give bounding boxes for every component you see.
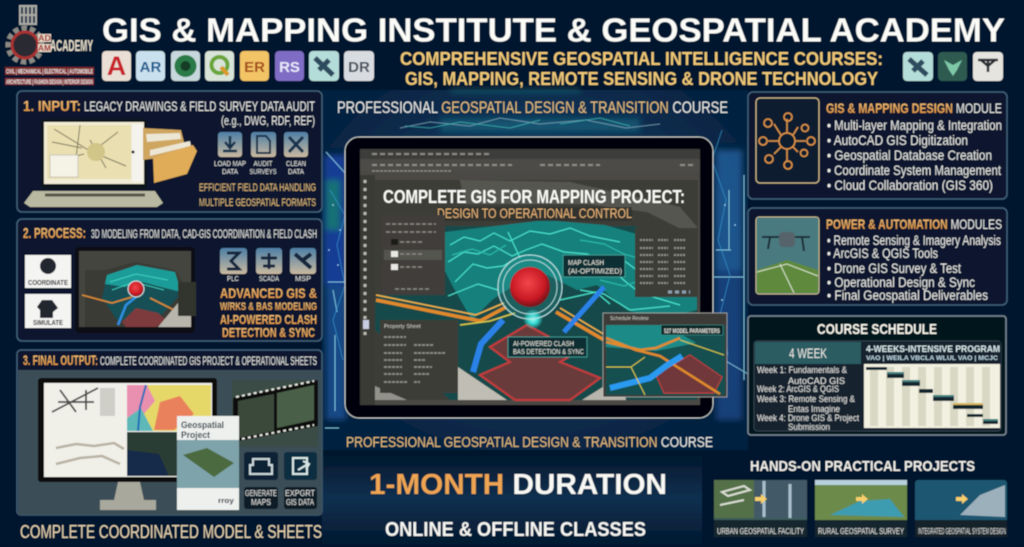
title: GIS & MAPPING INSTITUTE & GEOSPATIAL ACADEMY xyxy=(102,12,1005,48)
badge: coordinate xyxy=(25,255,71,288)
list: automation topics: • ArcGIS & QGIS Tools xyxy=(827,246,938,261)
project: urban facility: URBAN GEOSPATIAL FACILITY xyxy=(717,527,804,536)
box: geospatial project xyxy=(177,416,239,510)
week list: Week 3: Remote Sensing & xyxy=(757,394,856,405)
heading: automation modules: POWER & AUTOMATION MODULES xyxy=(826,216,1002,232)
icon: load map data: DATA xyxy=(222,167,238,176)
icon: audit surveys xyxy=(250,132,276,176)
project: integrated system xyxy=(915,480,1007,537)
heading: hands-on projects: HANDS-ON PRACTICAL PROJECTS xyxy=(750,458,975,475)
icon: load map data xyxy=(214,132,246,176)
week list: Week 1: Fundamentals & xyxy=(757,365,848,376)
delivery mode: ONLINE & OFFLINE CLASSES xyxy=(385,519,646,541)
box: geospatial project: Project xyxy=(181,430,211,441)
subtitle: GIS, MAPPING, REMOTE SENSING & DRONE TECHNOLOGY xyxy=(405,69,878,89)
icon: clean data xyxy=(284,132,308,176)
logo: CAD CAM Academy: ACADEMY xyxy=(50,38,93,55)
project: rural survey xyxy=(815,480,907,537)
panel: 2 process xyxy=(17,219,322,341)
tile: export gis data: GIS DATA xyxy=(286,498,315,507)
layers panel xyxy=(382,215,445,295)
heading: input: (e.g., DWG, RDF, REF) xyxy=(221,113,315,128)
heading: final output: 3. FINAL OUTPUT: xyxy=(23,352,98,368)
tile: generate maps xyxy=(244,452,278,509)
gantt chart xyxy=(861,342,1001,428)
table panel xyxy=(635,228,697,297)
project: urban facility xyxy=(714,480,807,537)
icons: PLC SCADA MSP: MSP xyxy=(295,276,311,283)
box: geospatial project: rroy xyxy=(218,498,234,505)
callout: map clash: (AI-OPTIMIZED) xyxy=(568,268,622,276)
icons: PLC SCADA MSP: PLC xyxy=(227,276,239,283)
inset: model parameters: Schedule Review xyxy=(610,316,649,322)
list: automation topics xyxy=(827,233,1001,303)
screen xyxy=(360,149,700,405)
list: mapping topics: • AutoCAD GIS Digitization xyxy=(827,132,968,148)
technology icons right xyxy=(903,52,1003,81)
heading: final output: COMPLETE COORDINATED GIS PROJECT & OPERATIONAL SHEETS xyxy=(100,354,317,368)
gantt chart: 4-WEEKS-INTENSIVE PROGRAM xyxy=(866,344,1000,354)
footer: left caption: COMPLETE COORDINATED MODEL & SHEETS xyxy=(20,522,322,542)
screen title: DESIGN TO OPERATIONAL CONTROL xyxy=(437,205,632,221)
callout: ai clash: AI-POWERED CLASH xyxy=(513,341,574,348)
panel: 1 input xyxy=(17,91,322,212)
folders xyxy=(143,128,197,183)
heading: input: LEGACY DRAWINGS & FIELD SURVEY DATA AUDIT xyxy=(84,98,315,114)
map scene xyxy=(375,180,697,400)
course heading top: PROFESSIONAL GEOSPATIAL DESIGN & TRANSITION COURSE xyxy=(337,98,728,117)
callout: ai clash: BAS DETECTION & SYNC xyxy=(513,349,584,356)
software icon row xyxy=(102,51,374,81)
list: automation topics: • Final Geospatial Deliverables xyxy=(827,288,988,303)
list: automation topics: • Drone GIS Survey & Test xyxy=(827,261,961,276)
icon: clean data: DATA xyxy=(288,167,304,176)
image: drone over fields xyxy=(756,217,819,294)
gantt chart: VAO | WEILA VBCLA WLUL VAO | MCJC xyxy=(866,356,999,362)
software icon row: RS xyxy=(279,59,300,76)
icon: load map data: LOAD MAP xyxy=(214,159,246,168)
icon: clean data: CLEAN xyxy=(286,159,306,168)
clash sphere xyxy=(498,255,562,329)
icon: audit surveys: SURVEYS xyxy=(250,167,276,176)
week list: Week 4: Drone GIS & Project xyxy=(757,413,859,424)
caption: process: ADVANCED GIS & xyxy=(220,285,317,301)
heading: process: 3D MODELING FROM DATA, CAD-GIS COORDINATION & FIELD CLASH xyxy=(91,227,317,241)
caption: process: AI-POWERED CLASH xyxy=(220,312,317,327)
properties panel xyxy=(380,320,458,393)
logo: CAD CAM Academy: CIVIL | MECHANICAL | ELECTRICAL | AUTOMOBILE xyxy=(6,70,93,76)
list: automation topics: • Operational Design & Sync xyxy=(827,275,975,290)
logo: CAD CAM Academy: ARCHITECTURE | FASHION DESIGN | INTERIOR DESIGN xyxy=(6,80,93,86)
project: rural survey: RURAL GEOSPATIAL SURVEY xyxy=(818,527,905,536)
callout: map clash: MAP CLASH xyxy=(568,260,604,267)
box: geospatial project: Geospatial xyxy=(181,420,224,431)
badge: simulate: SIMULATE xyxy=(33,320,63,327)
icons: PLC SCADA MSP xyxy=(220,248,316,283)
subtitle: COMPREHENSIVE GEOSPATIAL INTELLIGENCE COURSES: xyxy=(400,49,883,69)
icon: audit surveys: AUDIT xyxy=(254,159,273,168)
panel: course schedule xyxy=(748,316,1006,435)
week list: 4 WEEK xyxy=(789,345,827,361)
week list xyxy=(755,342,861,433)
caption: process xyxy=(220,285,317,340)
badge: coordinate: COORDINATE xyxy=(28,280,68,287)
caption: input: MULTIPLE GEOSPATIAL FORMATS xyxy=(199,197,316,209)
tile: export gis data: EXPGRT xyxy=(285,489,315,498)
heading: input xyxy=(23,98,315,128)
software icon row: DR xyxy=(348,59,370,76)
icon: network xyxy=(756,98,819,183)
tile: export gis data xyxy=(284,452,317,509)
list: mapping topics: • Cloud Collaboration (GIS 360) xyxy=(827,177,993,193)
mini tablet with model xyxy=(75,247,196,333)
panel: gis and mapping module xyxy=(748,92,1007,199)
software icon row: ER xyxy=(244,59,265,76)
heading: final output xyxy=(23,352,317,368)
software icon row: AR xyxy=(140,59,161,76)
tile: generate maps: GENERATE xyxy=(245,489,277,498)
callout: ai clash xyxy=(508,337,587,357)
caption: process: W/RKS & BAS MODELING xyxy=(220,301,317,313)
icons: PLC SCADA MSP: SCADA xyxy=(259,276,279,283)
week list: Submission xyxy=(788,422,830,433)
heading: mapping module: GIS & MAPPING DESIGN MODULE xyxy=(826,100,1002,116)
logo: CAD CAM Academy xyxy=(5,5,94,86)
central tablet xyxy=(345,137,727,418)
heading: schedule: COURSE SCHEDULE xyxy=(817,321,937,338)
week list: AutoCAD GIS xyxy=(788,376,845,387)
week list: Entas Imagine xyxy=(788,404,840,415)
screen title: COMPLETE GIS FOR MAPPING PROJECT: xyxy=(383,186,685,207)
heading: process xyxy=(23,225,317,242)
subtitle xyxy=(400,49,883,89)
callout: map clash xyxy=(563,255,625,277)
properties panel: Property Sheet xyxy=(384,324,421,330)
film strip xyxy=(232,380,318,447)
caption: input xyxy=(199,182,316,209)
logo: CAD CAM Academy: AM xyxy=(38,44,51,53)
screen title xyxy=(383,186,685,221)
monitor with map sheets xyxy=(38,378,217,510)
duration: 1-MONTH DURATION xyxy=(369,469,667,501)
tile: generate maps: MAPS xyxy=(251,498,271,507)
heading: input: 1. INPUT: xyxy=(23,98,81,115)
logo: CAD CAM Academy: AD xyxy=(38,34,51,43)
heading: process: 2. PROCESS: xyxy=(23,225,86,242)
list: mapping topics xyxy=(827,117,1002,193)
inset: model parameters: 527 MODEL PARAMETERS xyxy=(664,328,720,335)
inset: model parameters xyxy=(603,313,727,397)
caption: process: DETECTION & SYNC xyxy=(222,325,315,340)
panel: 3 final output xyxy=(17,350,322,515)
course heading bottom: PROFESSIONAL GEOSPATIAL DESIGN & TRANSITION COURSE xyxy=(346,434,713,451)
badge: simulate xyxy=(25,294,71,328)
panel: power and automation modules xyxy=(748,208,1007,305)
week list: Week 2: ArcGIS & QGIS xyxy=(757,384,839,395)
caption: input: EFFICIENT FIELD DATA HANDLING xyxy=(199,182,316,194)
software icon row: A xyxy=(107,51,126,81)
laptop with map xyxy=(24,119,163,207)
list: mapping topics: • Geospatial Database Creation xyxy=(827,147,992,163)
